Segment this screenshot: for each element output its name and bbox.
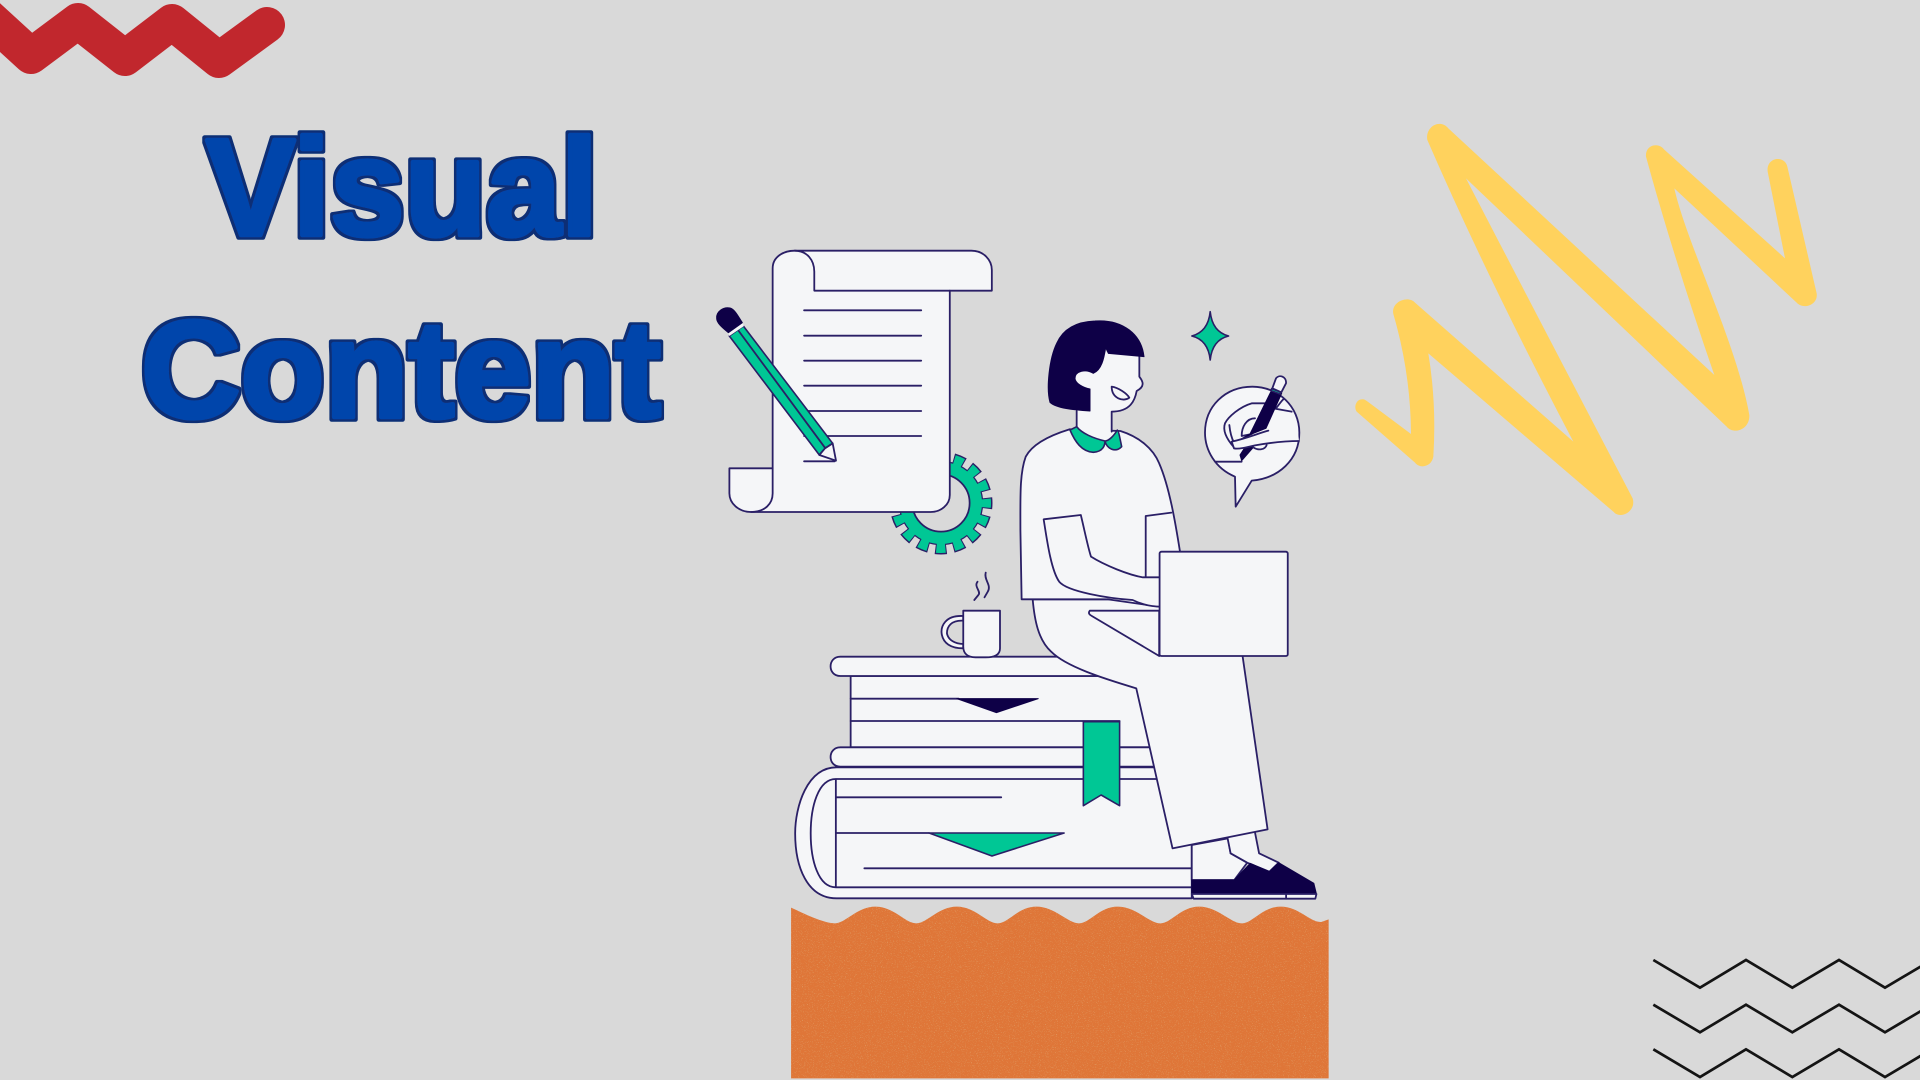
green bookmark ribbon: [1083, 722, 1120, 806]
yellow scribble decoration: [1355, 124, 1817, 515]
gear icon: [896, 458, 986, 548]
dark bookmark triangle: [957, 699, 1038, 713]
title: Content: [141, 293, 661, 447]
smile: [1112, 387, 1129, 400]
red zigzag decoration: [0, 13, 267, 60]
document scroll: [729, 251, 992, 512]
title: [141, 111, 661, 447]
green collar: [1070, 427, 1122, 452]
laptop: [1089, 552, 1288, 656]
green page triangle: [929, 833, 1064, 856]
pencil icon: [717, 308, 836, 461]
person: torso and arms: [1020, 429, 1180, 607]
coffee cup with steam: [942, 573, 1000, 657]
speech bubble with writing hand: [1205, 376, 1299, 507]
black zigzag lines decoration: [1653, 960, 1920, 1077]
orange textured block with wavy top: [791, 907, 1329, 1078]
person: legs and shoes: [1033, 599, 1316, 899]
green sparkle: [1192, 312, 1229, 360]
trousers: [1033, 599, 1268, 848]
person: head, hair and collar: [1048, 321, 1144, 452]
stack of books: [795, 657, 1192, 898]
title: Visual: [206, 111, 598, 265]
shoes: [1192, 863, 1316, 894]
